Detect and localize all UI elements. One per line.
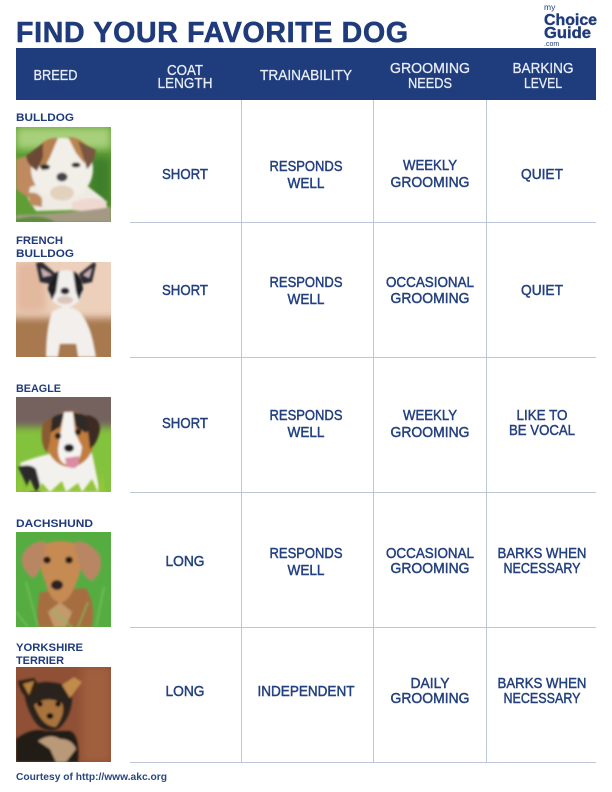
grooming cell: GROOMING bbox=[390, 175, 470, 191]
row: beagle bbox=[16, 384, 111, 492]
breed name bbox=[16, 235, 74, 260]
grooming cell: GROOMING bbox=[390, 691, 470, 707]
trainability cell: RESPONDS bbox=[270, 546, 342, 562]
grooming cell: DAILY bbox=[410, 676, 450, 692]
header: grooming needs: NEEDS bbox=[408, 75, 452, 92]
coat length cell: LONG bbox=[166, 684, 204, 700]
grooming cell: OCCASIONAL bbox=[386, 275, 474, 291]
coat length cell: SHORT bbox=[162, 283, 208, 299]
barking cell: NECESSARY bbox=[504, 691, 581, 707]
row: french bulldog bbox=[16, 236, 111, 357]
logo: myChoiceGuide.com: my bbox=[544, 2, 556, 12]
header: grooming needs bbox=[390, 60, 470, 92]
header: coat length: COAT bbox=[167, 62, 203, 79]
table header band bbox=[16, 48, 596, 100]
breed name: BEAGLE bbox=[16, 383, 61, 395]
breed name: FRENCH bbox=[16, 235, 63, 247]
breed name: DACHSHUND bbox=[16, 518, 93, 530]
grooming cell bbox=[386, 275, 474, 307]
header: coat length: LENGTH bbox=[158, 75, 212, 92]
trainability cell: WELL bbox=[288, 292, 324, 308]
logo: myChoiceGuide.com: .com bbox=[544, 41, 559, 48]
grooming cell: OCCASIONAL bbox=[386, 546, 474, 562]
grooming cell bbox=[390, 408, 470, 441]
barking cell bbox=[498, 676, 586, 707]
header: barking level bbox=[512, 60, 574, 92]
trainability cell: WELL bbox=[288, 425, 324, 441]
breed name: BULLDOG bbox=[16, 248, 74, 260]
barking cell: BARKS WHEN bbox=[498, 676, 586, 692]
logo: myChoiceGuide.com bbox=[544, 2, 597, 48]
photo: french bulldog puppy bbox=[16, 262, 111, 357]
breed name: TERRIER bbox=[16, 655, 64, 667]
photo: bulldog puppy bbox=[16, 127, 111, 222]
header: grooming needs: GROOMING bbox=[390, 60, 470, 77]
photo: beagle puppy bbox=[16, 397, 111, 492]
grooming cell: WEEKLY bbox=[403, 158, 457, 174]
photo: dachshund puppy bbox=[16, 532, 111, 627]
header: barking level: LEVEL bbox=[524, 75, 562, 92]
coat length cell: LONG bbox=[166, 554, 204, 570]
coat length cell: SHORT bbox=[162, 416, 208, 432]
trainability cell bbox=[270, 546, 342, 579]
grooming cell: WEEKLY bbox=[403, 408, 457, 424]
grooming cell bbox=[390, 158, 470, 191]
trainability cell bbox=[270, 159, 342, 192]
trainability cell: RESPONDS bbox=[270, 408, 342, 424]
row: bulldog bbox=[16, 112, 111, 222]
barking cell: QUIET bbox=[521, 167, 563, 183]
logo: myChoiceGuide.com: Choice bbox=[544, 12, 597, 29]
breed name bbox=[16, 642, 83, 667]
trainability cell: WELL bbox=[288, 563, 324, 579]
trainability cell: RESPONDS bbox=[270, 159, 342, 175]
barking cell: QUIET bbox=[521, 283, 563, 299]
table grid lines bbox=[130, 100, 596, 762]
photo: yorkshire terrier puppy bbox=[16, 667, 111, 762]
row: yorkshire terrier bbox=[16, 642, 111, 762]
source credit: Courtesy of http://www.akc.org bbox=[16, 771, 167, 783]
grooming cell: GROOMING bbox=[390, 561, 470, 577]
header: barking level: BARKING bbox=[512, 60, 574, 77]
grooming cell: GROOMING bbox=[390, 291, 470, 307]
row: dachshund bbox=[16, 518, 111, 627]
coat length cell: SHORT bbox=[162, 167, 208, 183]
trainability cell bbox=[270, 408, 342, 441]
header: trainability: TRAINABILITY bbox=[260, 67, 352, 84]
grooming cell bbox=[386, 546, 474, 577]
barking cell: LIKE TO bbox=[516, 408, 568, 424]
barking cell bbox=[498, 546, 586, 577]
grooming cell bbox=[390, 676, 470, 707]
barking cell: BE VOCAL bbox=[509, 423, 575, 439]
trainability cell: WELL bbox=[288, 176, 324, 192]
barking cell bbox=[509, 408, 575, 439]
trainability cell: RESPONDS bbox=[270, 275, 342, 291]
breed name: YORKSHIRE bbox=[16, 642, 83, 654]
barking cell: BARKS WHEN bbox=[498, 546, 586, 562]
grooming cell: GROOMING bbox=[390, 425, 470, 441]
trainability cell: INDEPENDENT bbox=[258, 684, 355, 700]
trainability cell bbox=[270, 275, 342, 308]
barking cell: NECESSARY bbox=[504, 561, 581, 577]
breed name: BULLDOG bbox=[16, 112, 74, 124]
title: FIND YOUR FAVORITE DOG bbox=[16, 17, 408, 49]
header: coat length bbox=[158, 62, 212, 92]
logo: myChoiceGuide.com: Guide bbox=[544, 25, 591, 42]
header: breed: BREED bbox=[34, 67, 78, 84]
